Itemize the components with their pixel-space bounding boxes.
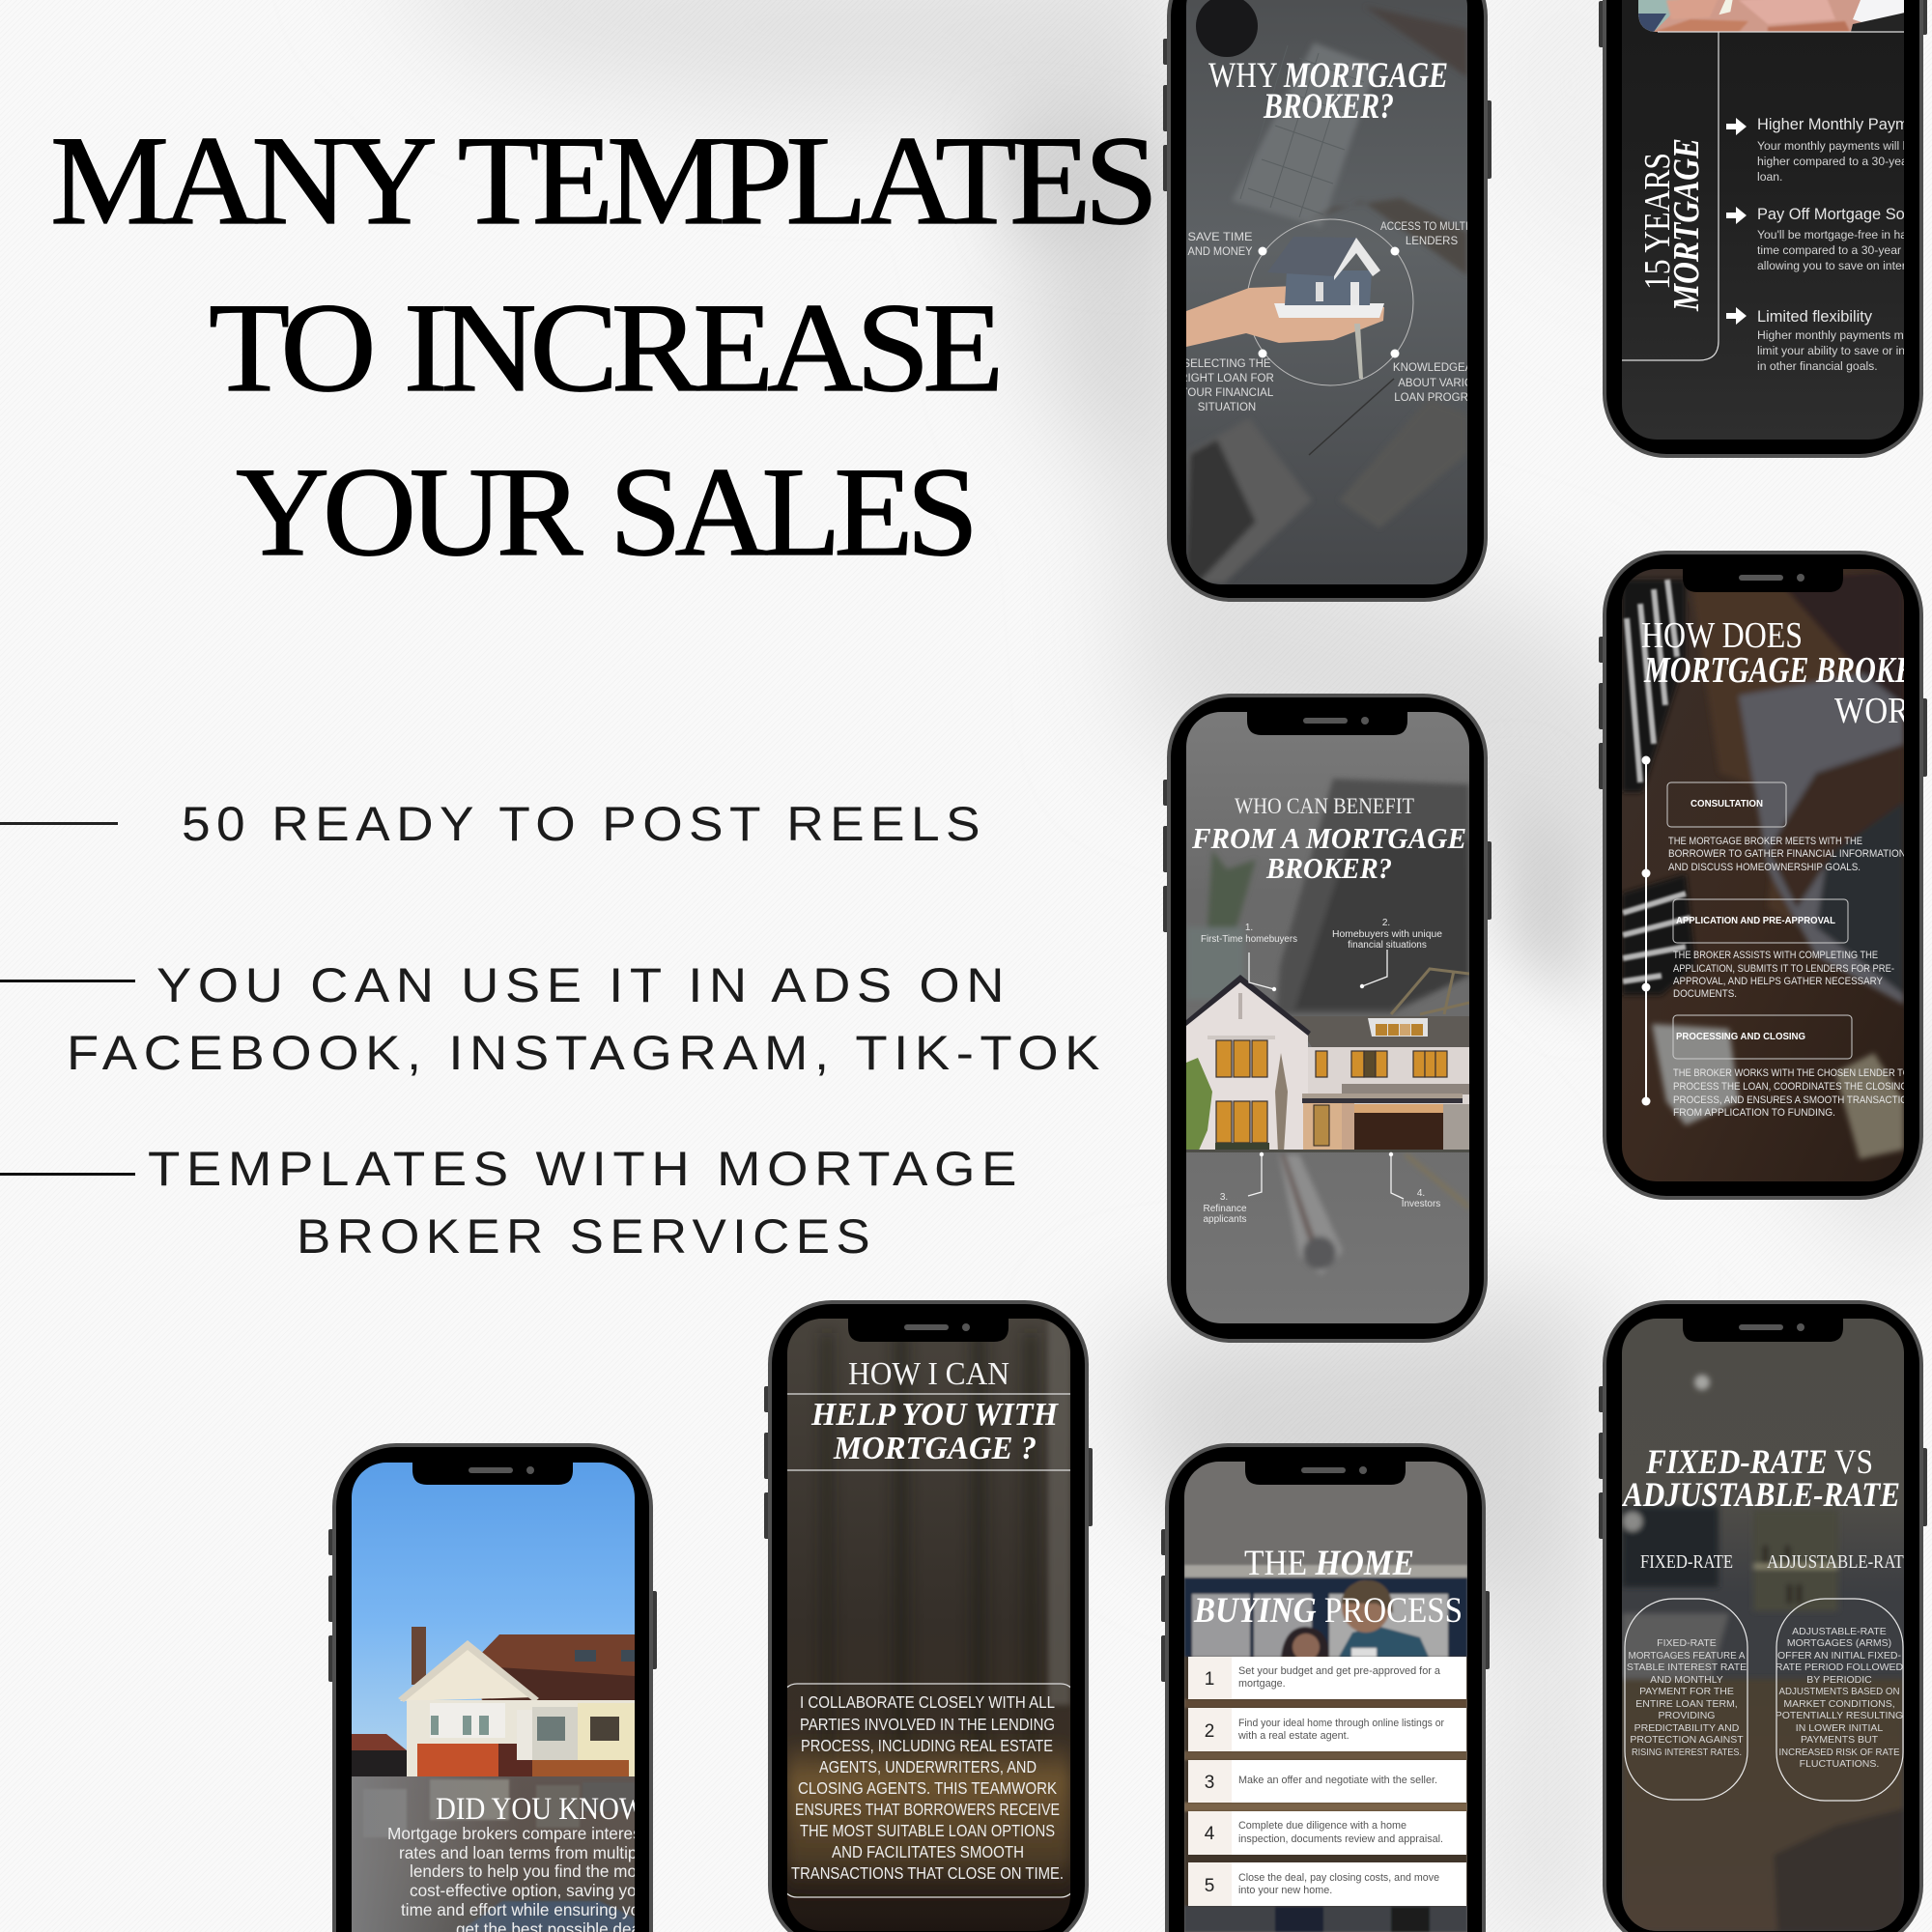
step text: inspection, documents review and appraisal. [1238,1833,1443,1845]
paragraph [791,1692,1064,1883]
adjustable rate copy: POTENTIALLY RESULTING [1776,1710,1903,1721]
adjustable rate copy: MARKET CONDITIONS, [1783,1698,1895,1710]
step text: Complete due diligence with a home [1238,1820,1406,1832]
gold frame decor [1391,969,1469,1014]
feature item: ads on social: YOU CAN USE IT IN ADS ON [156,958,1010,1012]
step descriptions: DOCUMENTS. [1673,988,1737,1000]
step descriptions: BORROWER TO GATHER FINANCIAL INFORMATION [1668,848,1906,860]
comparison pills [1625,1599,1903,1801]
hand holding house [1186,237,1384,379]
timeline [1642,755,1650,1105]
rotated title [1644,139,1698,311]
arrows [1726,118,1747,325]
adjustable rate copy: RATE PERIOD FOLLOWED [1776,1662,1904,1673]
heading: WHY MORTGAGE [1208,56,1448,96]
beneficiary labels: 1. [1245,923,1253,933]
paragraph: AGENTS, UNDERWRITERS, AND [819,1757,1037,1776]
benefit labels: AND MONEY [1188,246,1253,258]
benefit labels: YOUR FINANCIAL [1180,387,1274,399]
phone: why mortgage broker [1163,0,1493,602]
benefit labels: SELECTING THE [1182,358,1271,370]
paragraph: rates and loan terms from multiple [399,1843,650,1862]
photo of hands [1638,0,1905,32]
step text [1237,1665,1444,1896]
feature item: broker templates: TEMPLATES WITH MORTAGE [148,1142,1023,1196]
phone: how does mortgage broker work [1599,551,1932,1200]
keyboard keys [1240,45,1364,217]
fixed rate copy: RISING INTEREST RATES. [1632,1747,1742,1758]
step text: with a real estate agent. [1237,1730,1350,1742]
beneficiary labels [1201,918,1442,1225]
house photo [1186,975,1469,1152]
step text: into your new home. [1238,1885,1332,1896]
paragraph [387,1824,650,1932]
paragraph: I COLLABORATE CLOSELY WITH ALL [800,1692,1055,1712]
adjustable rate copy: FLUCTUATIONS. [1800,1758,1879,1770]
heading [1193,1544,1463,1631]
heading [810,1356,1059,1466]
step text: mortgage. [1238,1678,1286,1690]
benefit labels: KNOWLEDGEABLE [1393,362,1493,374]
rotated title: 15 YEARS [1637,153,1678,290]
adjustable rate copy: BY PERIODIC [1806,1674,1872,1686]
heading rules [787,1394,1070,1470]
heading: BROKER? [1263,87,1394,127]
consequence list: Higher monthly payments may [1757,328,1918,342]
benefit labels: ACCESS TO MULTIPLE [1380,221,1487,233]
benefit labels [1186,222,1467,411]
benefit labels: RIGHT LOAN FOR [1179,373,1274,384]
step labels: APPLICATION AND PRE-APPROVAL [1676,916,1835,926]
step text: Set your budget and get pre-approved for a [1238,1665,1440,1677]
rotated title panel [1622,32,1904,360]
benefit labels: SITUATION [1198,402,1256,413]
fixed rate copy: PROVIDING [1659,1710,1715,1721]
fixed rate copy: PREDICTABILITY AND [1634,1722,1740,1734]
heading: THE HOME [1244,1544,1414,1583]
paragraph: cost-effective option, saving you [410,1881,645,1900]
step descriptions: FROM APPLICATION TO FUNDING. [1673,1107,1835,1119]
beneficiary labels: applicants [1203,1214,1247,1225]
benefit labels: LOAN PROGRAMS [1394,392,1492,404]
fixed rate copy: PAYMENT FOR THE [1639,1686,1734,1697]
consequence list: You'll be mortgage-free in half the [1757,228,1932,242]
step boxes [1667,782,1852,1059]
consequence list: Pay Off Mortgage Sooner [1757,206,1932,223]
leader lines [1248,950,1404,1199]
step descriptions: APPLICATION, SUBMITS IT TO LENDERS FOR PRE- [1673,963,1894,975]
paragraph: THE MOST SUITABLE LOAN OPTIONS [800,1821,1055,1840]
beneficiary labels: financial situations [1348,940,1427,951]
feature item: 50 reels: 50 READY TO POST REELS [182,797,986,851]
fixed rate copy: FIXED-RATE [1657,1637,1717,1649]
feature item: ads on social [0,958,1106,1080]
consequence list: Limited flexibility [1757,308,1873,326]
beneficiary labels: 4. [1417,1188,1425,1199]
beneficiary labels: 3. [1220,1192,1228,1203]
feature item: broker templates: BROKER SERVICES [297,1209,876,1264]
consequence list [1757,118,1904,373]
heading: DID YOU KNOW? [436,1792,658,1827]
heading: BROKER? [1265,851,1392,885]
circle ring [1247,219,1413,385]
phone: 15 years mortgage [1599,0,1932,458]
step descriptions: PROCESS, AND ENSURES A SMOOTH TRANSACTION [1673,1094,1915,1106]
step rows [1188,1657,1466,1906]
paragraph: AND FACILITATES SMOOTH [832,1842,1024,1861]
step text: Find your ideal home through online listings or [1238,1718,1444,1729]
phone: fixed vs adjustable [1599,1300,1927,1932]
fixed rate copy [1627,1637,1747,1758]
title [50,109,1151,582]
benefit labels: LENDERS [1406,236,1458,247]
consequence list: time compared to a 30-year loan, [1757,243,1930,257]
feature item: broker templates [0,1142,1023,1264]
step labels [1676,799,1835,1042]
beneficiary labels: 2. [1382,918,1390,928]
fixed rate copy: PROTECTION AGAINST [1630,1734,1744,1746]
house photo [352,1627,635,1776]
title: MANY TEMPLATES [50,109,1151,251]
consequence list: higher compared to a 30-year [1757,155,1912,168]
consequence list: in other financial goals. [1757,359,1878,373]
consequence list: Your monthly payments will be [1757,139,1916,153]
step descriptions: APPROVAL, AND HELPS GATHER NECESSARY [1673,976,1883,987]
heading: HOW DOES [1641,615,1803,656]
consequence list: limit your ability to save or invest [1757,344,1927,357]
step labels: PROCESSING AND CLOSING [1676,1032,1805,1042]
heading [1208,63,1447,118]
fixed rate copy: AND MONTHLY [1650,1674,1723,1686]
heading: HOW I CAN [848,1356,1009,1392]
heading: WHO CAN BENEFIT [1235,794,1414,818]
paragraph: PROCESS, INCLUDING REAL ESTATE [801,1736,1053,1755]
heading: FIXED-RATE VS [1645,1442,1873,1481]
feature item: ads on social: FACEBOOK, INSTAGRAM, TIK-TOK [67,1026,1106,1080]
step descriptions: THE MORTGAGE BROKER MEETS WITH THE [1668,836,1862,847]
text overlay [352,1776,635,1932]
beneficiary labels: First-Time homebuyers [1201,934,1297,945]
step descriptions: THE BROKER ASSISTS WITH COMPLETING THE [1673,950,1878,961]
striped sleeve [1623,580,1690,981]
beneficiary labels: Refinance [1203,1204,1247,1214]
step descriptions: AND DISCUSS HOMEOWNERSHIP GOALS. [1668,862,1861,873]
adjustable rate copy: INCREASED RISK OF RATE [1779,1747,1899,1758]
step numbers: 1 [1205,1669,1214,1690]
step numbers [1205,1669,1215,1896]
fixed rate copy: STABLE INTEREST RATE [1627,1662,1747,1673]
phone: the home buying process [1161,1443,1490,1932]
paragraph: ENSURES THAT BORROWERS RECEIVE [795,1800,1060,1819]
adjustable rate copy [1776,1626,1904,1770]
paragraph: lenders to help you find the most [410,1861,650,1881]
paragraph: CLOSING AGENTS. THIS TEAMWORK [798,1778,1057,1798]
adjustable rate copy: MORTGAGES (ARMS) [1787,1637,1891,1649]
adjustable rate copy: ADJUSTMENTS BASED ON [1779,1686,1899,1697]
phone: how I can help [764,1300,1093,1932]
step text: Close the deal, pay closing costs, and move [1238,1872,1439,1884]
heading: BUYING PROCESS [1193,1591,1463,1631]
heading [1641,615,1932,731]
heading [1621,1442,1900,1514]
heading: FROM A MORTGAGE [1191,821,1466,855]
adjustable rate copy: OFFER AN INITIAL FIXED- [1777,1650,1901,1662]
benefit labels: SAVE TIME [1188,232,1253,243]
rotated title: MORTGAGE [1666,138,1707,312]
step numbers: 4 [1205,1824,1215,1844]
coaster [1196,0,1258,57]
step descriptions: PROCESS THE LOAN, COORDINATES THE CLOSING [1673,1081,1908,1093]
paragraph: TRANSACTIONS THAT CLOSE ON TIME. [791,1863,1064,1883]
consequence list: loan. [1757,170,1782,184]
title: YOUR SALES [236,440,972,582]
adjustable rate copy: ADJUSTABLE-RATE [1792,1626,1887,1637]
benefit labels: ABOUT VARIOUS [1398,378,1489,389]
consequence list: allowing you to save on interest. [1757,259,1924,272]
step numbers: 5 [1205,1876,1214,1896]
fixed rate copy: ENTIRE LOAN TERM, [1635,1698,1738,1710]
text panel [781,1684,1076,1897]
step labels: CONSULTATION [1690,799,1763,810]
phone: did you know [328,1443,658,1932]
step numbers: 2 [1205,1721,1214,1742]
paragraph: PARTIES INVOLVED IN THE LENDING [800,1715,1055,1734]
heading: HELP YOU WITH [810,1397,1059,1433]
paragraph: Mortgage brokers compare interest [387,1824,646,1843]
paragraph: time and effort while ensuring you [401,1900,649,1919]
title: TO INCREASE [209,276,998,418]
column headings [1640,1551,1914,1573]
beneficiary labels: Investors [1402,1199,1440,1209]
adjustable rate copy: IN LOWER INITIAL [1796,1722,1883,1734]
beneficiary labels: Homebuyers with unique [1332,929,1442,940]
phone: who can benefit [1163,694,1492,1343]
heading: MORTGAGE ? [833,1431,1037,1466]
benefit dots [1258,247,1399,357]
step descriptions [1668,836,1915,1119]
fixed rate copy: MORTGAGES FEATURE A [1629,1650,1745,1662]
heading [1191,794,1466,885]
step text: Make an offer and negotiate with the seller. [1238,1775,1437,1786]
adjustable rate copy: PAYMENTS BUT [1801,1734,1879,1746]
step numbers: 3 [1205,1773,1214,1793]
column headings: FIXED-RATE [1640,1551,1733,1573]
